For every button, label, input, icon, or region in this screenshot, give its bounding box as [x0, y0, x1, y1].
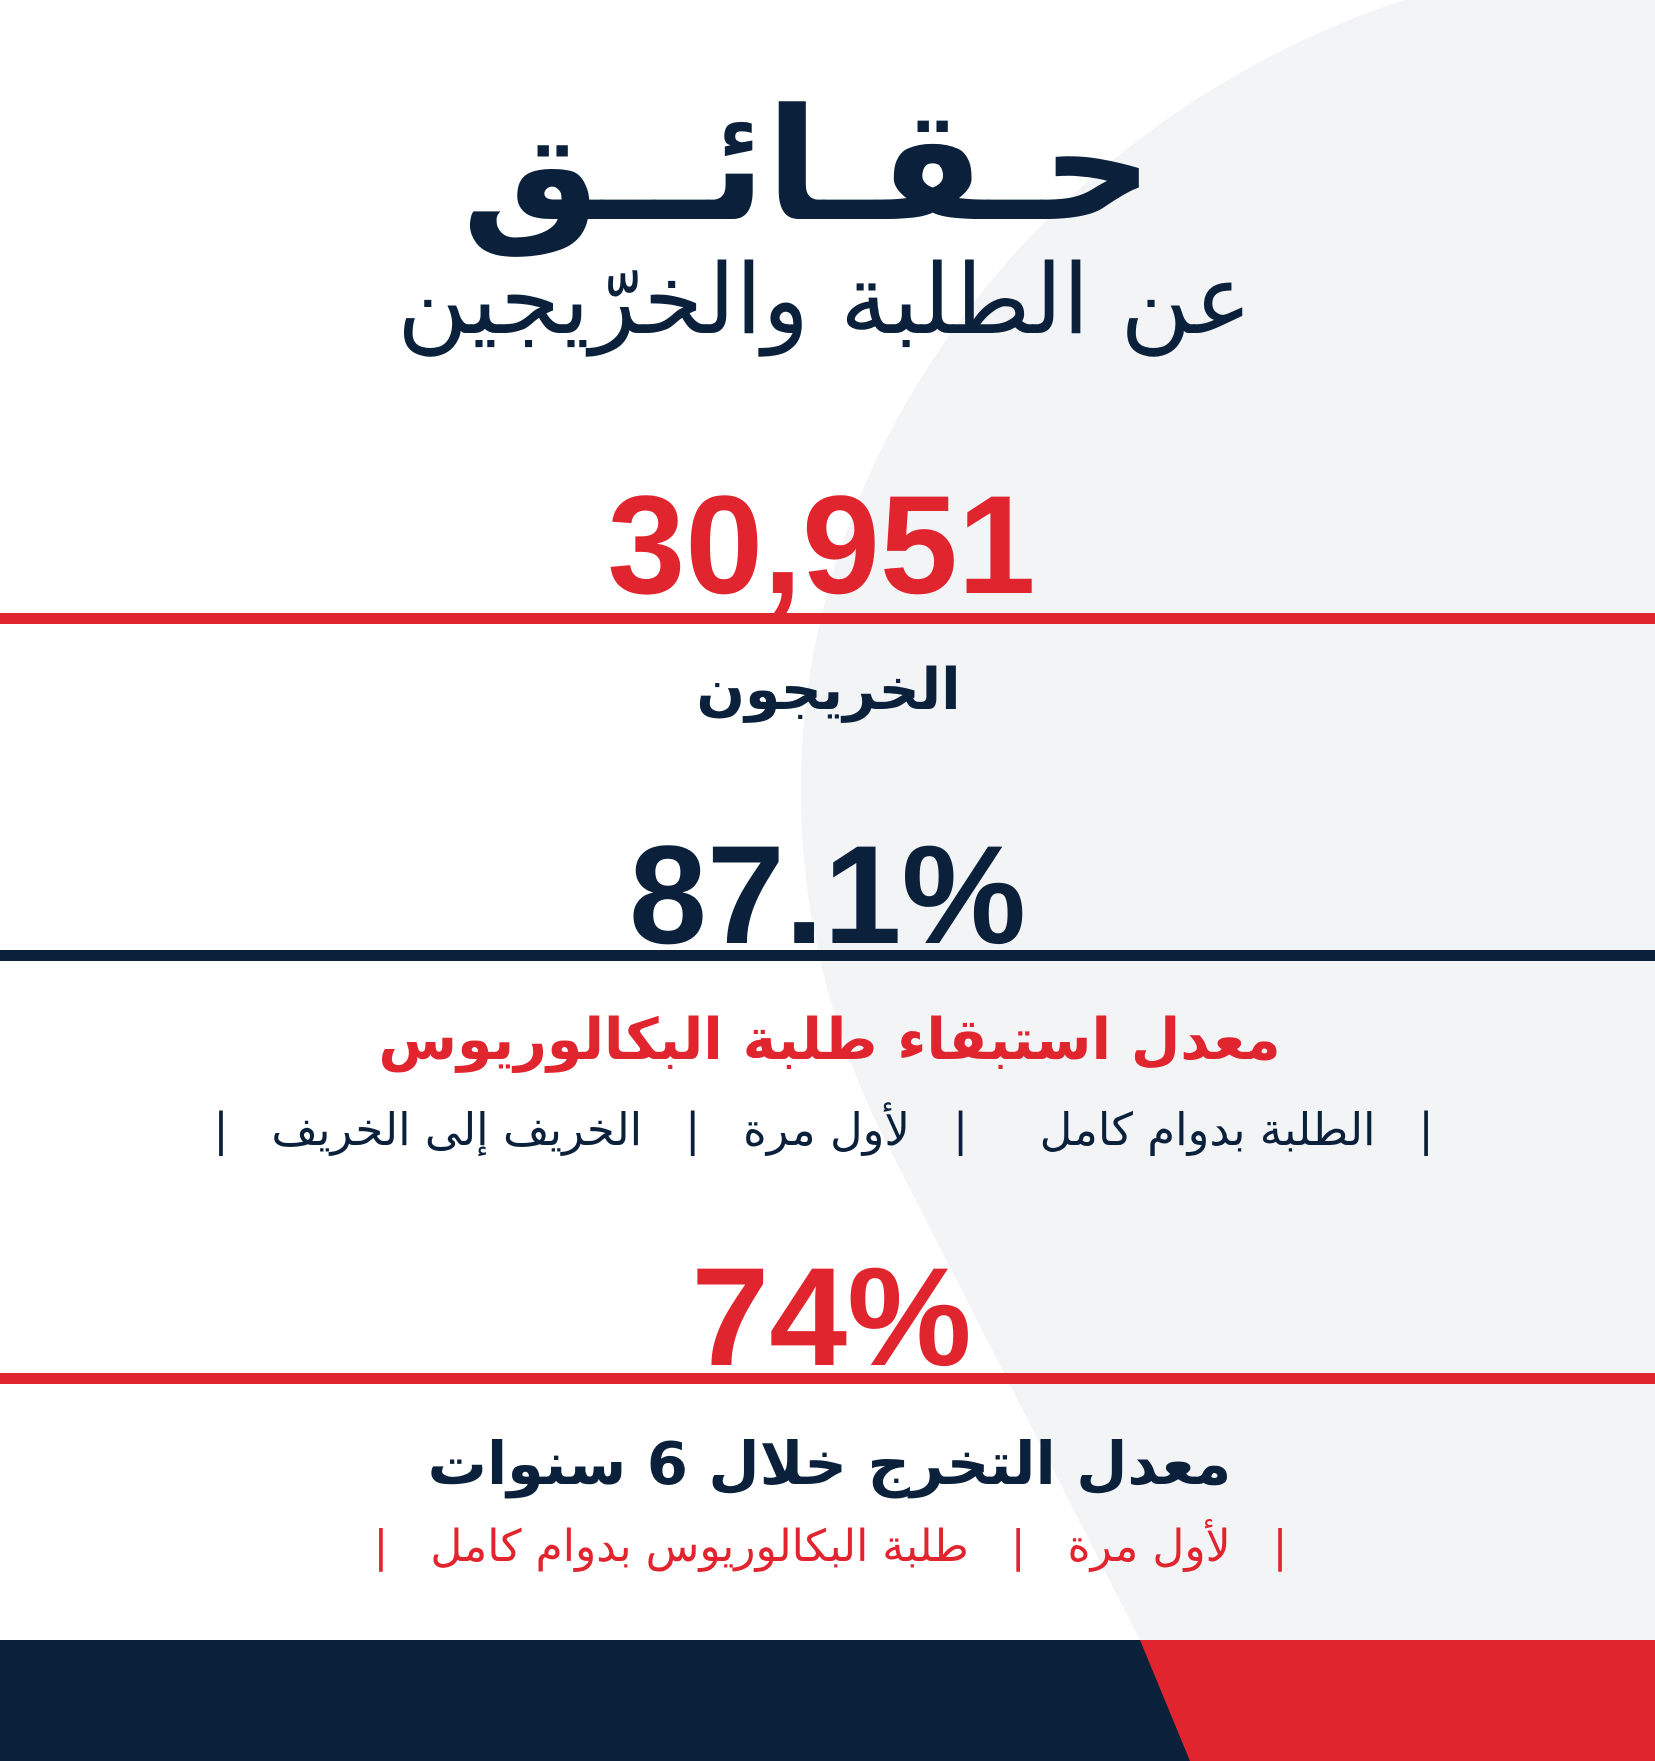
- red divider: [0, 613, 1655, 624]
- red divider: [0, 1373, 1655, 1384]
- subtitle: عن الطلبة والخرّيجين: [397, 243, 1252, 356]
- label: retention details: | الطلبة بدوام كامل | لأول مرة | الخريف إلى الخريف |: [213, 1103, 1434, 1156]
- label: graduation heading: معدل التخرج خلال 6 سنوات: [428, 1429, 1231, 1498]
- title: حـقـائــق: [462, 75, 1153, 256]
- stat: graduation rate: 74%: [691, 1238, 972, 1395]
- footer band: [0, 1640, 1655, 1761]
- stat: graduates number: 30,951: [607, 466, 1036, 623]
- label: graduates: الخريجون: [696, 657, 961, 723]
- label: graduation details: | لأول مرة | طلبة البكالوريوس بدوام كامل |: [374, 1521, 1287, 1572]
- label: retention heading: معدل استبقاء طلبة البكالوريوس: [378, 1007, 1281, 1073]
- navy divider: [0, 950, 1655, 961]
- stat: retention: 87.1%: [629, 816, 1026, 973]
